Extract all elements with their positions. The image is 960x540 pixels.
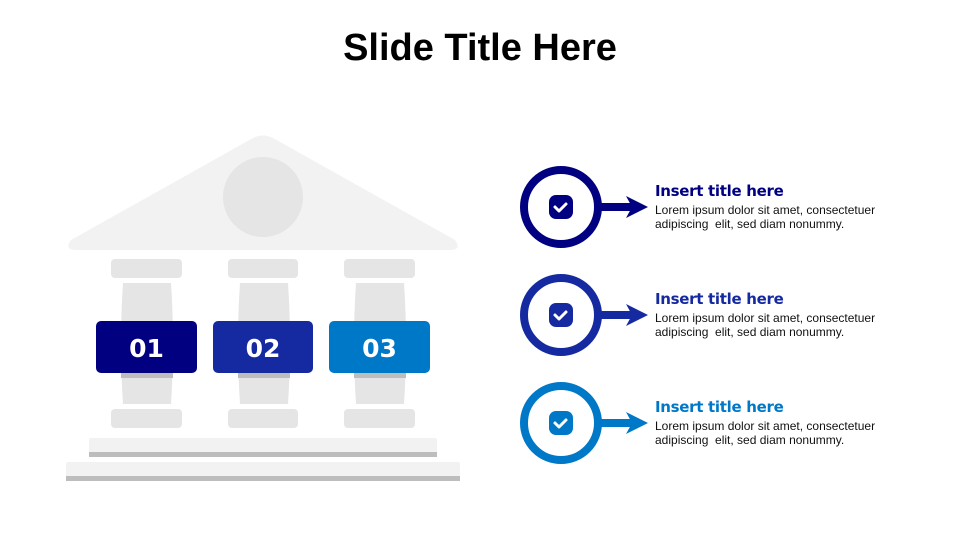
item 2 icon — [524, 278, 648, 352]
columns — [111, 259, 415, 428]
badge 02: 02 — [246, 334, 280, 363]
item 2 text: Insert title here — [655, 290, 784, 308]
item 2 text: Lorem ipsum dolor sit amet, consectetuer adipiscing elit, sed diam nonummy. — [655, 311, 875, 339]
item 3 text — [655, 398, 875, 447]
item 1 text: Insert title here — [655, 182, 784, 200]
badge 03: 03 — [362, 334, 397, 363]
item 1 text: Lorem ipsum dolor sit amet, consectetuer adipiscing elit, sed diam nonummy. — [655, 203, 875, 231]
badge 01 — [96, 321, 197, 373]
badge 01: 01 — [129, 334, 164, 363]
item 3 text: Lorem ipsum dolor sit amet, consectetuer adipiscing elit, sed diam nonummy. — [655, 419, 875, 447]
badge 03 — [329, 321, 430, 373]
badge 02 — [213, 321, 313, 373]
roof — [68, 136, 458, 250]
base steps — [66, 438, 460, 481]
item 3 icon — [524, 386, 648, 460]
title: Slide Title Here — [343, 27, 617, 69]
item 2 text — [655, 290, 875, 339]
item 1 text — [655, 182, 875, 231]
item 3 text: Insert title here — [655, 398, 784, 416]
item 1 icon — [524, 170, 648, 244]
